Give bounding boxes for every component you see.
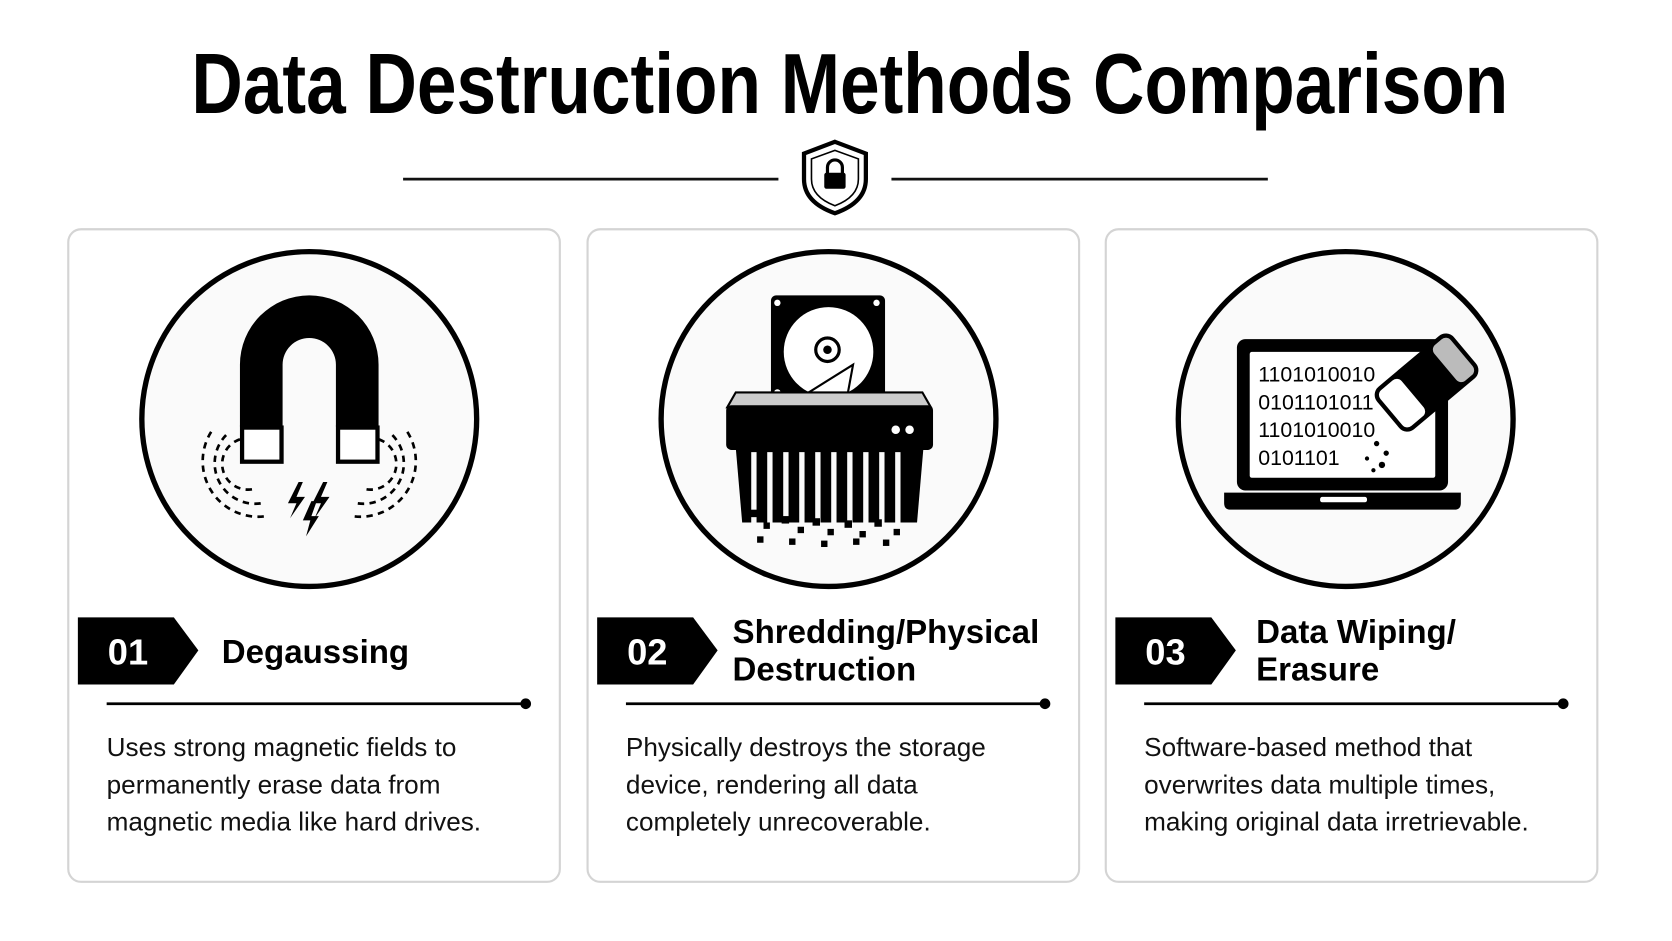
text: degaussing description: permanently erase data from bbox=[107, 769, 440, 799]
heading: degaussing: Degaussing bbox=[222, 634, 409, 671]
heading: shredding: Shredding/Physical bbox=[733, 614, 1039, 651]
heading: data wiping: Erasure bbox=[1256, 651, 1379, 688]
icon: shredder with hard drive bbox=[661, 252, 996, 586]
badge 03: 03 bbox=[1145, 631, 1186, 672]
text: shredding description: completely unrecoverable. bbox=[626, 807, 931, 837]
icon: laptop with eraser: 0101101011 bbox=[1258, 390, 1374, 414]
text: data wiping description: making original data irretrievable. bbox=[1144, 807, 1529, 837]
icon: laptop with eraser: 0101101 bbox=[1258, 446, 1340, 470]
text: degaussing description: Uses strong magnetic fields to bbox=[107, 732, 456, 762]
badge 01 bbox=[78, 617, 198, 685]
badge 01: 01 bbox=[108, 631, 148, 672]
panel: shredding bbox=[588, 229, 1079, 882]
heading: data wiping bbox=[1256, 614, 1456, 688]
heading: shredding bbox=[733, 614, 1039, 688]
icon: magnet bbox=[142, 252, 477, 586]
icon: shield lock bbox=[804, 142, 866, 213]
text: degaussing description: magnetic media like hard drives. bbox=[107, 807, 481, 837]
panel: degaussing bbox=[68, 229, 560, 882]
text: data wiping description: overwrites data multiple times, bbox=[1144, 769, 1495, 799]
text: shredding description: device, rendering all data bbox=[626, 769, 918, 799]
badge 02: 02 bbox=[627, 631, 667, 672]
text: shredding description: Physically destroys the storage bbox=[626, 732, 986, 762]
text: shredding description bbox=[626, 732, 986, 837]
icon: laptop with eraser bbox=[1178, 252, 1513, 586]
heading: shredding: Destruction bbox=[733, 651, 916, 688]
badge 03 bbox=[1115, 617, 1236, 685]
panel: data wiping bbox=[1106, 229, 1597, 882]
badge 02 bbox=[597, 617, 718, 685]
icon: laptop with eraser: 1101010010 bbox=[1258, 363, 1375, 387]
text: data wiping description: Software-based method that bbox=[1144, 732, 1473, 762]
text: data wiping description bbox=[1144, 732, 1529, 837]
text: degaussing description bbox=[107, 732, 481, 837]
icon: laptop with eraser: 1101010010 bbox=[1258, 418, 1375, 442]
heading: data wiping: Data Wiping/ bbox=[1256, 614, 1456, 651]
